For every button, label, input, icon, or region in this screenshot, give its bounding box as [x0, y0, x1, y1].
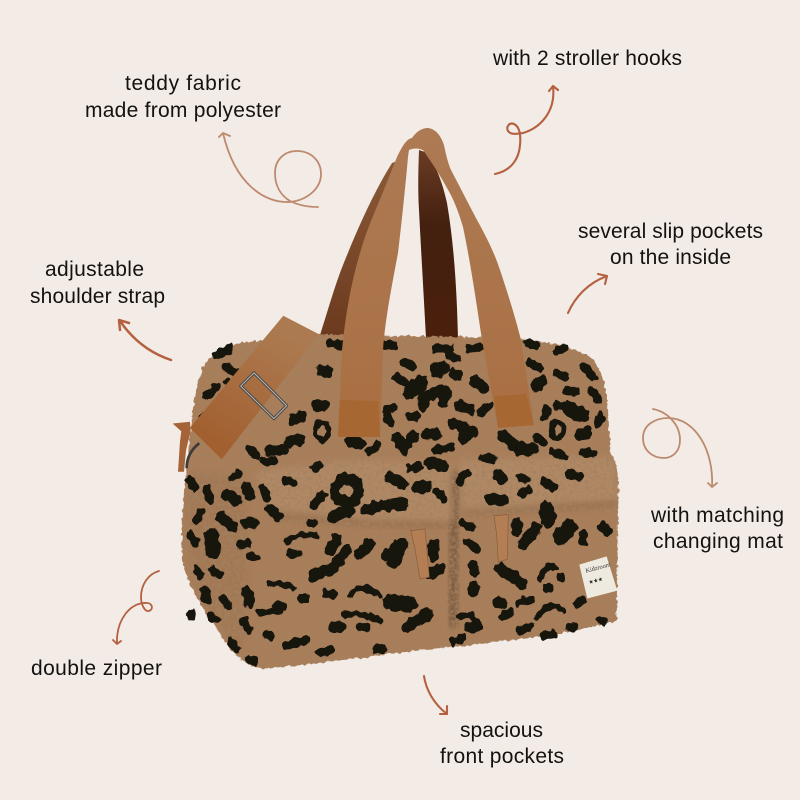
- body shading: [186, 456, 618, 652]
- shoulder strap: [190, 316, 319, 459]
- arrow: [219, 133, 321, 207]
- rear handle: [320, 150, 458, 338]
- label: on the inside: [610, 246, 731, 269]
- arrow: [119, 320, 171, 360]
- label: double zipper: [31, 657, 162, 680]
- label: [440, 719, 564, 768]
- callout: stroller hooks: [492, 47, 682, 174]
- handle stitched patch right: [494, 394, 534, 428]
- label: made from polyester: [85, 99, 281, 122]
- sewn label: Kidzroom: [585, 561, 611, 575]
- sewn label: ★★★: [588, 576, 604, 586]
- callout: slip pockets: [568, 220, 763, 313]
- product photo: leopard teddy bag: [173, 128, 618, 668]
- front handle: [338, 128, 534, 437]
- label: shoulder strap: [30, 285, 165, 308]
- callout: shoulder strap: [30, 258, 171, 360]
- label: [30, 258, 165, 308]
- arrow: [495, 86, 558, 174]
- arrow: [568, 274, 607, 313]
- label: changing mat: [653, 530, 783, 553]
- handle stitched patch left: [338, 400, 380, 437]
- label: [650, 504, 784, 553]
- label: teddy fabric: [125, 72, 241, 95]
- bag body: [182, 334, 618, 668]
- label: spacious: [460, 719, 543, 742]
- buckle: [241, 373, 287, 419]
- callout: teddy fabric: [85, 72, 321, 207]
- arrow: [643, 409, 717, 487]
- arrow: [424, 676, 447, 714]
- callout: front pockets: [424, 676, 564, 768]
- label: [85, 72, 281, 122]
- label: front pockets: [440, 745, 564, 768]
- label: with matching: [650, 504, 784, 527]
- label: adjustable: [45, 258, 144, 281]
- callout: double zipper: [31, 571, 162, 680]
- arrow: [113, 571, 159, 644]
- callout: changing mat: [643, 409, 784, 553]
- left pocket tab: [411, 529, 429, 579]
- fleece texture: [182, 334, 618, 668]
- label: with 2 stroller hooks: [492, 47, 682, 70]
- zipper pull: [173, 422, 199, 472]
- label: [578, 220, 763, 269]
- leopard spots: [190, 343, 610, 661]
- right pocket tab: [494, 515, 508, 562]
- label: several slip pockets: [578, 220, 763, 243]
- sewn label: [579, 556, 617, 599]
